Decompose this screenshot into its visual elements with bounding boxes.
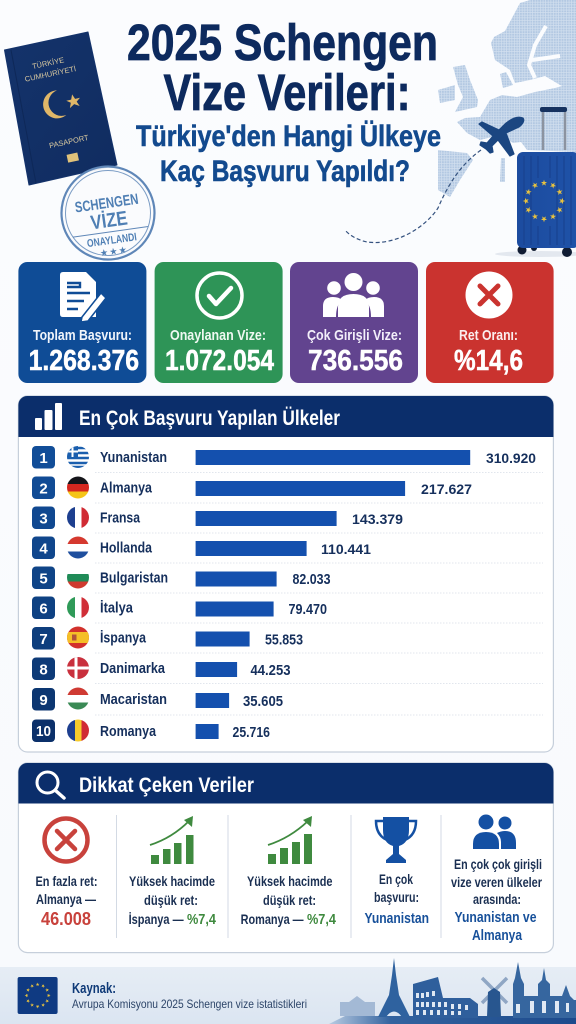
row 9 Macaristan: Macaristan (100, 692, 167, 708)
fact: çok girişli vize: arasında: (473, 891, 521, 907)
row 3 Fransa: 3 (39, 510, 48, 528)
icon: x circle (44, 818, 88, 862)
panel: en çok başvuru yapılan ülkeler (18, 396, 553, 752)
fact: çok girişli vize: En çok çok girişli (454, 856, 542, 872)
flag: Germany (67, 476, 89, 498)
row 5 Bulgaristan: 82.033 (292, 572, 330, 588)
row 6 İtalya: İtalya (100, 600, 134, 616)
value: 1.268.376 (29, 345, 139, 377)
fact: İspanya: Yüksek hacimde (129, 873, 215, 889)
footer band (0, 958, 576, 1024)
row 10 Romanya: Romanya (100, 724, 157, 740)
row 2 Almanya (32, 476, 472, 499)
icon: passport: PASAPORT (48, 133, 90, 150)
bridge and palace (340, 996, 375, 1016)
label: Onaylanan Vize: (170, 327, 266, 344)
icon: magnifier (37, 772, 64, 798)
icon: trophy (376, 817, 416, 863)
fact: çok girişli vize: Almanya (472, 927, 523, 944)
row 9 Macaristan: 35.605 (243, 694, 283, 710)
row 1 Yunanistan (32, 446, 536, 468)
row 5 Bulgaristan: 5 (39, 570, 48, 588)
fact: en fazla ret (36, 818, 98, 929)
icon: Schengen approved stamp: ONAYLANDI (86, 231, 137, 250)
row 9 Macaristan (32, 688, 283, 710)
icon: x circle (466, 272, 512, 318)
source text (72, 980, 307, 1011)
fact: çok girişli vize: Yunanistan ve (454, 909, 536, 926)
flag: Spain (67, 626, 89, 648)
row 2 Almanya: 2 (39, 480, 48, 498)
Eiffel tower (378, 958, 410, 1017)
card: onaylanan vize (155, 262, 283, 383)
fact: en çok başvuru: başvuru: (374, 889, 419, 905)
row 2 Almanya: 217.627 (421, 482, 472, 497)
label: Çok Girişli Vize: (307, 327, 402, 344)
icon: Schengen approved stamp: SCHENGEN (74, 191, 140, 216)
fact: İspanya: İspanya — (129, 911, 184, 927)
row 1 Yunanistan: 1 (39, 450, 48, 467)
fact: çok girişli vize (451, 814, 542, 944)
Colosseum (413, 977, 478, 1018)
icon: rising green chart (268, 816, 312, 864)
fact: Romanya: düşük ret: (263, 892, 316, 908)
row 3 Fransa: Fransa (100, 510, 141, 526)
panel header (18, 763, 553, 804)
title: Vize Verileri: (164, 64, 410, 121)
flag: Romania (67, 720, 90, 742)
row 6 İtalya: 79.470 (288, 602, 327, 618)
row 2 Almanya: Almanya (100, 480, 153, 496)
fact: en çok başvuru: En çok (379, 871, 413, 887)
heading: En Çok Başvuru Yapılan Ülkeler (79, 407, 340, 430)
row 10 Romanya: 10 (36, 724, 51, 740)
flag: Denmark (67, 657, 89, 679)
icon: Schengen approved stamp: VİZE (89, 206, 129, 234)
row 6 İtalya (32, 596, 327, 619)
fact: çok girişli vize: vize veren ülkeler (451, 874, 542, 890)
heading: Dikkat Çeken Veriler (79, 774, 254, 797)
row 7 İspanya: İspanya (100, 630, 147, 646)
card: ret oranı (426, 262, 554, 383)
panel header (18, 396, 553, 437)
row 8 Danimarka: Danimarka (100, 661, 166, 677)
card: çok girişli vize (290, 262, 418, 383)
row 1 Yunanistan: Yunanistan (100, 450, 167, 466)
flag: France (67, 506, 90, 528)
label: Ret Oranı: (459, 327, 518, 344)
row 4 Hollanda: 4 (39, 540, 48, 558)
flag: Netherlands (67, 536, 89, 558)
flag: Italy (67, 596, 90, 618)
icon: passport: CUMHURİYETİ (24, 64, 77, 84)
title (127, 14, 438, 121)
row 8 Danimarka: 44.253 (250, 663, 290, 679)
card: toplam başvuru (18, 262, 146, 383)
fact: İspanya: %7,4 (187, 911, 217, 928)
icon: people group (323, 273, 384, 317)
fact: en fazla ret: En fazla ret: (36, 873, 98, 889)
flag: Greece (67, 446, 89, 468)
row 10 Romanya (32, 720, 270, 742)
fact: Romanya: Yüksek hacimde (247, 873, 333, 889)
row 3 Fransa: 143.379 (352, 512, 403, 527)
source text: Avrupa Komisyonu 2025 Schengen vize istatistikleri (72, 997, 307, 1011)
windmill (482, 978, 507, 1017)
icon: passport: TÜRKİYE (31, 55, 65, 71)
flight path (345, 150, 481, 243)
row 9 Macaristan: 9 (39, 692, 48, 709)
fact: en fazla ret: 46.008 (41, 909, 91, 929)
row 4 Hollanda (32, 536, 372, 559)
row 7 İspanya: 7 (39, 631, 48, 648)
icon: Schengen approved stamp (55, 160, 161, 266)
row 1 Yunanistan: 310.920 (486, 451, 536, 466)
value: %14,6 (454, 345, 523, 377)
fact: en çok başvuru (364, 817, 429, 927)
row 5 Bulgaristan: Bulgaristan (100, 570, 168, 586)
source text: Kaynak: (72, 980, 116, 997)
icon: passport (4, 32, 117, 185)
row 6 İtalya: 6 (39, 600, 48, 618)
panel: dikkat çeken veriler (18, 763, 553, 953)
icon: document with pencil (60, 272, 106, 322)
label: Toplam Başvuru: (33, 327, 132, 344)
row 3 Fransa (32, 506, 403, 529)
cathedral (513, 962, 576, 1018)
row 4 Hollanda: 110.441 (321, 542, 372, 557)
flag: Hungary (67, 688, 89, 710)
icon: airplane (479, 117, 524, 156)
row 7 İspanya (32, 626, 303, 650)
row 8 Danimarka (32, 657, 290, 680)
row 10 Romanya: 25.716 (232, 725, 270, 741)
value: 736.556 (308, 345, 403, 377)
row 5 Bulgaristan (32, 566, 330, 589)
row 7 İspanya: 55.853 (265, 632, 303, 648)
fact: İspanya (129, 816, 217, 928)
icon: Schengen approved stamp: ★ ★ ★ (100, 245, 128, 258)
subtitle: Türkiye'den Hangi Ülkeye (136, 120, 441, 153)
fact: en çok başvuru: Yunanistan (364, 910, 429, 927)
value: 1.072.054 (165, 345, 274, 377)
icon: suitcase (495, 107, 576, 257)
fact: İspanya: düşük ret: (144, 892, 198, 908)
row 4 Hollanda: Hollanda (100, 540, 153, 556)
icon: rising green chart (150, 816, 194, 864)
skyline illustration (329, 958, 576, 1024)
icon: bar chart (35, 403, 62, 430)
fact: Romanya: %7,4 (307, 911, 337, 928)
fact: Romanya (241, 816, 337, 928)
title: 2025 Schengen (127, 14, 438, 71)
fact: en fazla ret: Almanya — (36, 891, 96, 907)
dotted map of Europe (438, 0, 576, 197)
subtitle (136, 120, 441, 188)
subtitle: Kaç Başvuru Yapıldı? (160, 155, 410, 188)
icon: two people (473, 814, 516, 849)
flag: Bulgaria (67, 574, 89, 588)
icon: check circle (197, 273, 242, 318)
row 8 Danimarka: 8 (39, 662, 48, 678)
icon: EU flag (18, 977, 58, 1014)
fact: Romanya: Romanya — (241, 911, 304, 927)
